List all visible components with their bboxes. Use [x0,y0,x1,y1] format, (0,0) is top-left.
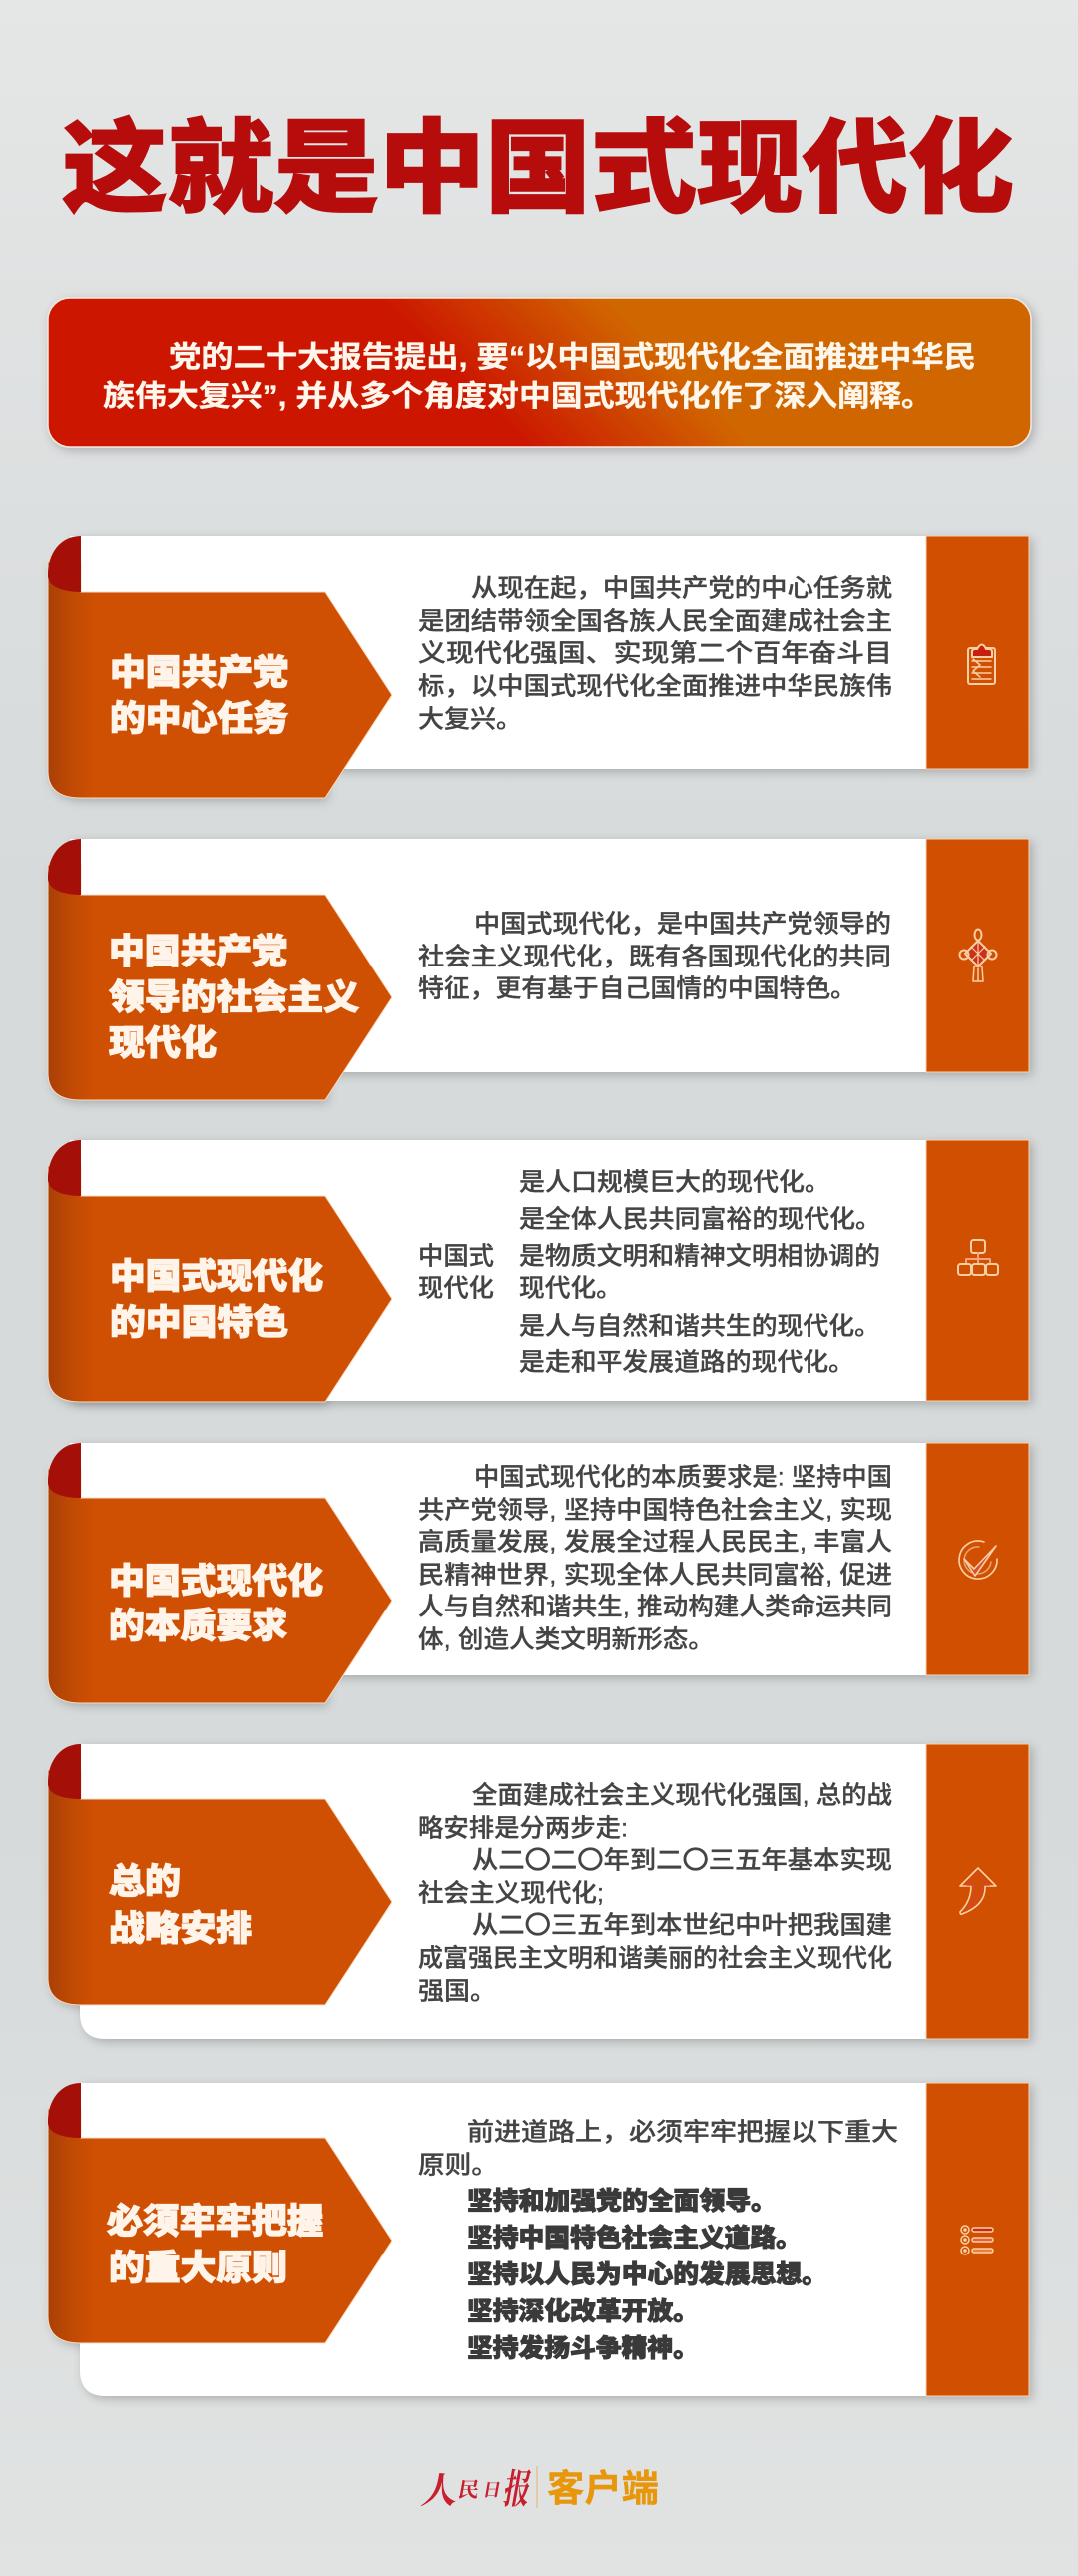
logo: 人民日报 [419,2468,534,2512]
card body [80,2083,1029,2396]
body text: 大复兴。 [418,705,522,733]
body text [418,1464,892,1653]
label: 的本质要求 [109,1608,287,1645]
label [107,2203,323,2288]
body text [418,1168,881,1376]
intro text [103,341,976,413]
body text: 体, 创造人类文明新形态。 [418,1625,714,1653]
panel: 重大原则 [48,2083,1029,2396]
card body [70,839,1029,1072]
body text: 特征，更有基于自己国情的中国特色。 [418,974,856,1002]
label [109,1863,252,1949]
body text: 原则。 [418,2151,498,2179]
ribbon [48,1140,392,1402]
icon: hierarchy [958,1240,998,1275]
body text: 坚持以人民为中心的发展思想。 [467,2260,827,2288]
label [109,933,359,1063]
panel: 中国特色 [48,1140,1029,1402]
label: 现代化 [109,1024,217,1063]
divider [537,2466,538,2508]
label: 的重大原则 [109,2249,287,2288]
intro text: 党的二十大报告提出, 要“以中国式现代化全面推进中华民 [169,341,976,374]
body text: 现代化 [418,1274,494,1302]
label [110,653,288,739]
body text: 从二〇三五年到本世纪中叶把我国建 [472,1911,892,1939]
label: 中国共产党 [110,653,288,693]
card body [70,1140,1029,1401]
logo: 人民日报: 人 [419,2471,462,2511]
body text: 坚持中国特色社会主义道路。 [467,2223,802,2253]
body text: 标，以中国式现代化全面推进中华民族伟 [418,673,892,701]
body text: 是团结带领全国各族人民全面建成社会主 [418,607,892,635]
logo [419,2466,659,2512]
body text: 略安排是分两步走: [418,1815,628,1843]
panel: intro [48,298,1031,447]
label: 总的 [109,1863,181,1901]
body text [418,575,892,733]
icon: chinese knot [960,929,996,981]
body text: 成富强民主文明和谐美丽的社会主义现代化 [418,1945,892,1973]
label: 中国式现代化 [110,1258,323,1296]
body text [418,911,891,1002]
icon: curved arrow [960,1868,996,1914]
body text: 共产党领导, 坚持中国特色社会主义, 实现 [418,1496,892,1524]
body text [418,1781,892,2005]
body text: 是全体人民共同富裕的现代化。 [519,1206,881,1234]
ribbon [48,1744,392,2005]
body text: 中国式现代化，是中国共产党领导的 [474,911,891,939]
label: 的中心任务 [110,699,288,739]
label: 中国共产党 [109,933,287,971]
ribbon [48,536,392,798]
body text: 高质量发展, 发展全过程人民民主, 丰富人 [418,1528,892,1556]
body text: 前进道路上，必须牢牢把握以下重大 [467,2119,898,2147]
title: 这就是中国式现代化 [62,112,1014,226]
icon: clipboard [968,645,995,684]
logo: 人民日报: 日 [481,2480,503,2500]
logo: 人民日报: 民 [456,2478,481,2502]
body text: 全面建成社会主义现代化强国, 总的战 [472,1781,892,1809]
intro text: 族伟大复兴”, 并从多个角度对中国式现代化作了深入阐释。 [103,380,933,413]
body text: 坚持和加强党的全面领导。 [467,2187,777,2215]
card body [80,1744,1029,2039]
body text: 是人口规模巨大的现代化。 [519,1168,830,1196]
card body [70,1443,1029,1675]
label [110,1258,323,1342]
label: 必须牢牢把握 [107,2203,323,2241]
label: 领导的社会主义 [109,978,359,1017]
body text: 社会主义现代化，既有各国现代化的共同 [418,943,891,970]
body text: 强国。 [418,1977,496,2005]
logo: 人民日报: 报 [500,2468,534,2512]
panel: 本质要求 [48,1443,1029,1703]
ribbon [48,839,392,1100]
body text: 民精神世界, 实现全体人民共同富裕, 促进 [418,1562,892,1590]
icon: list [961,2226,993,2254]
panel: 中心任务 [48,536,1029,798]
label: 的中国特色 [110,1304,288,1342]
body text: 坚持深化改革开放。 [467,2298,699,2326]
body text: 坚持发扬斗争精神。 [467,2334,699,2362]
body text: 中国式现代化的本质要求是: 坚持中国 [474,1464,892,1492]
body text: 社会主义现代化; [418,1879,604,1907]
body text: 中国式 [418,1242,494,1270]
ribbon [48,2083,392,2343]
body text: 从二〇二〇年到二〇三五年基本实现 [472,1847,892,1875]
body text: 现代化。 [519,1274,622,1302]
body text: 从现在起，中国共产党的中心任务就 [471,575,892,603]
label: 中国式现代化 [109,1562,323,1602]
label: 战略安排 [109,1909,252,1949]
panel: 社会主义现代化 [48,839,1029,1100]
body text: 是人与自然和谐共生的现代化。 [519,1312,880,1340]
body text: 义现代化强国、实现第二个百年奋斗目 [418,639,892,667]
body text: 是物质文明和精神文明相协调的 [519,1242,880,1270]
body text: 人与自然和谐共生, 推动构建人类命运共同 [418,1594,892,1621]
card body [70,536,1029,769]
body text: 是走和平发展道路的现代化。 [519,1348,854,1376]
panel: 战略安排 [48,1744,1029,2039]
body text [418,2119,898,2362]
logo: 客户端: 客户端 [547,2468,659,2509]
ribbon [48,1443,392,1703]
label [109,1562,323,1645]
icon: check circle [959,1541,997,1579]
